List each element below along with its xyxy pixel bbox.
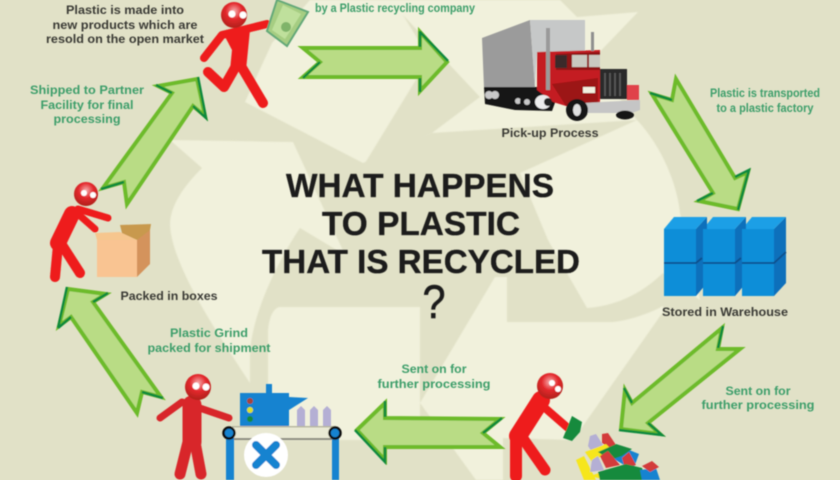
icon: pile of plastic — [576, 433, 660, 480]
icon: cardboard box — [95, 224, 151, 277]
text: made into new products: new products which are — [52, 20, 198, 32]
icon: person picking bottle — [516, 373, 582, 476]
title — [262, 167, 580, 328]
arrow: warehouse to bottles — [619, 326, 740, 435]
arrow: grinder to boxes — [58, 287, 163, 413]
text: made into new products: resold on the open market — [46, 34, 204, 46]
arrow: boxes to market — [101, 77, 206, 204]
arrow: truck to warehouse — [650, 79, 749, 210]
text: sent on right: Sent on for — [726, 386, 791, 398]
icon: person with box — [55, 182, 108, 277]
text: plastic grind: packed for shipment — [148, 343, 271, 355]
left arrow of symbol — [170, 140, 345, 383]
text: packed in boxes: Packed in boxes — [120, 291, 218, 303]
text: transported — [710, 88, 820, 115]
arrow: bottles to grinder — [355, 401, 502, 462]
text: sent on right — [702, 386, 814, 412]
text: sent on middle: further processing — [378, 379, 490, 391]
icon: person with money — [204, 2, 267, 103]
arrows — [58, 31, 749, 462]
text: sent on right: further processing — [702, 400, 814, 412]
text: pick-up process: Pick-up Process — [502, 128, 598, 140]
recycling symbol watermark — [170, 0, 700, 480]
title: ? — [422, 275, 446, 328]
centre lower panel of symbol — [268, 307, 420, 440]
icon: truck — [482, 20, 640, 121]
icon: money — [267, 0, 308, 46]
title: THAT IS RECYCLED — [262, 243, 580, 280]
icon: warehouse boxes — [664, 217, 786, 296]
right band of symbol — [520, 120, 700, 308]
text: shipped to partner: Shipped to Partner — [30, 85, 145, 97]
lower right band of symbol — [420, 277, 663, 480]
text: made into new products — [46, 5, 204, 46]
text: sent on middle: Sent on for — [402, 364, 467, 376]
arrow: money to truck — [303, 31, 448, 92]
dark wedge in top arrow — [365, 15, 480, 163]
top arrow of symbol — [245, 0, 638, 163]
icon: grinder machine — [224, 384, 340, 480]
text: shipped to partner: Facility for final — [40, 100, 134, 112]
title: WHAT HAPPENS — [286, 167, 554, 204]
icon: person at machine — [160, 374, 229, 474]
text: plastic grind — [148, 328, 271, 355]
text: collected by company: by a Plastic recycling company — [315, 3, 476, 15]
text: shipped to partner: processing — [54, 114, 120, 126]
text: transported: Plastic is transported — [710, 88, 820, 100]
text: plastic grind: Plastic Grind — [170, 328, 248, 340]
text: sent on middle — [378, 364, 490, 391]
title: TO PLASTIC — [322, 205, 520, 242]
text: stored in warehouse: Stored in Warehouse — [662, 307, 788, 319]
text: transported: to a plastic factory — [716, 103, 814, 115]
text: made into new products: Plastic is made into — [66, 5, 184, 17]
text: shipped to partner — [30, 85, 145, 126]
